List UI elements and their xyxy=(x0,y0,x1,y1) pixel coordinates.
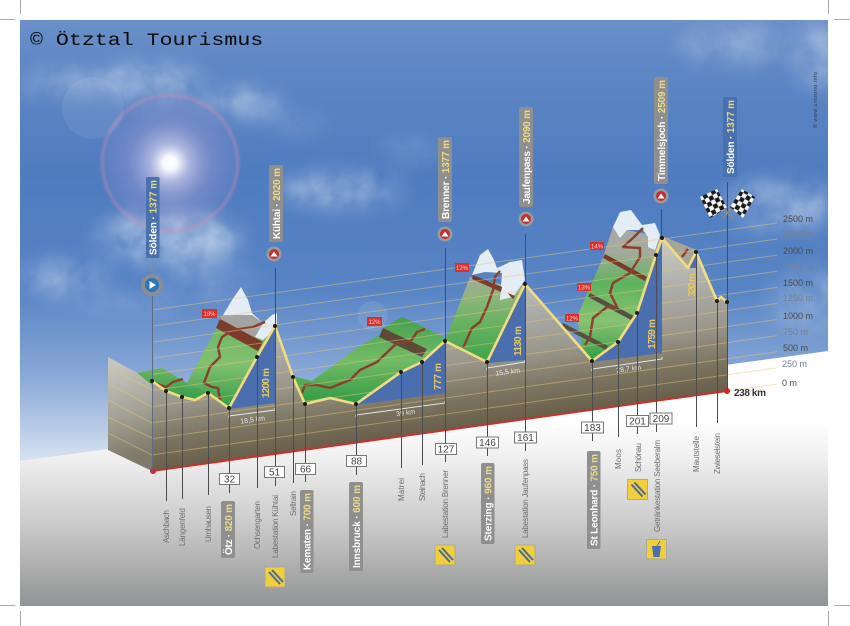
snow caps xyxy=(223,210,660,340)
km 66: 66 xyxy=(300,464,311,476)
place names below profile: Umhausen xyxy=(204,506,213,542)
icon: food station Jaufenpass xyxy=(515,545,535,565)
title: © Ötztal Tourismus xyxy=(30,30,263,50)
tag: 18% xyxy=(202,309,217,318)
place names below profile: Zwieselstein xyxy=(713,433,722,474)
altitude scale labels xyxy=(782,214,813,388)
km 161 xyxy=(514,432,536,444)
height: 320 m: 320 m xyxy=(687,273,698,297)
icon: summit Kühtai xyxy=(266,246,282,262)
km 209 xyxy=(650,413,672,425)
slope: Timmelsjoch xyxy=(577,227,662,361)
snow: Jaufenpass xyxy=(472,249,525,300)
place names below profile: Steinach xyxy=(418,473,427,501)
tag: 12% Brenner: 12% xyxy=(368,320,381,326)
distance brackets xyxy=(229,357,662,426)
tag: 12% Brenner xyxy=(367,317,382,326)
slope: Brenner xyxy=(293,317,445,406)
km 201: 201 xyxy=(629,416,646,428)
km 66 xyxy=(296,464,316,476)
green slopes and mountains xyxy=(137,227,697,408)
tag: 12% Jaufenpass: 12% xyxy=(456,266,469,272)
altitude scale labels: 0 m xyxy=(782,378,797,388)
label: Sterzing: Sterzing · 960 m xyxy=(484,466,494,541)
altitude scale labels: 1000 m xyxy=(783,311,813,321)
gradient tags xyxy=(202,242,604,326)
triangle: Zwieselstein xyxy=(688,252,696,268)
triangle: Jaufenpass xyxy=(488,284,525,363)
km 88 xyxy=(346,456,366,468)
place names below profile xyxy=(162,433,722,558)
label: Innsbruck: Innsbruck · 600 m xyxy=(352,485,363,568)
tag: 13% xyxy=(577,283,591,292)
km 51: 51 xyxy=(269,468,280,478)
icon: food station Brenner xyxy=(435,545,455,565)
tag: 14% xyxy=(590,242,604,250)
distance: 18,5 km: 18,5 km xyxy=(240,415,266,426)
icon: summit Jaufenpass xyxy=(518,212,534,226)
altitude grid lines xyxy=(108,223,777,471)
altitude scale labels: 250 m xyxy=(782,359,807,369)
label: Sölden start: Sölden · 1377 m xyxy=(148,180,160,255)
band: Timmelsjoch 14% xyxy=(603,254,647,281)
climb triangles xyxy=(230,238,696,409)
background: sky xyxy=(20,20,828,470)
profile left side wall xyxy=(108,357,152,471)
band: Jaufenpass lower xyxy=(508,293,515,299)
marker lines xyxy=(152,182,728,501)
label: St Leonhard: St Leonhard · 750 m xyxy=(590,454,600,546)
altitude scale labels: 1500 m xyxy=(783,278,813,288)
height: 1200 m: 1200 m xyxy=(261,368,272,398)
distance: 28,7 km: 28,7 km xyxy=(616,364,642,375)
icon: summit Brenner xyxy=(438,226,452,242)
icon: food station Schönau xyxy=(628,480,648,500)
slope: Kühtai xyxy=(187,315,275,408)
km 183: 183 xyxy=(584,423,601,434)
place names below profile: Ochsengarten xyxy=(253,501,262,549)
label: Kematen: Kematen · 700 m xyxy=(302,493,314,570)
place names below profile: Aschbach xyxy=(162,510,171,543)
place names below profile: Mautstelle xyxy=(692,435,701,472)
height: 1759 m: 1759 m xyxy=(647,319,658,349)
sun with halo ring xyxy=(62,77,388,331)
altitude scale labels: 2000 m xyxy=(783,246,813,256)
label: Sölden finish: Sölden · 1377 m xyxy=(726,100,737,174)
km 209: 209 xyxy=(653,414,670,425)
km 146: 146 xyxy=(479,438,496,449)
km 183 xyxy=(582,422,604,434)
profile ridge line xyxy=(152,238,727,408)
tag: 13%: 13% xyxy=(578,286,591,292)
kilometre boxes xyxy=(220,413,672,486)
triangle: Brenner xyxy=(356,341,445,405)
band: Timmelsjoch 13% xyxy=(588,293,634,320)
band: Kühtai steep xyxy=(216,319,263,351)
km 32: 32 xyxy=(224,474,235,486)
profile body xyxy=(152,238,727,471)
label: Kühtai: Kühtai · 2020 m xyxy=(272,168,283,239)
height: 777 m: 777 m xyxy=(433,363,444,390)
ground xyxy=(20,351,828,606)
icon: drink station xyxy=(646,540,666,559)
km 51 xyxy=(264,466,284,478)
slope: Jaufenpass xyxy=(445,277,525,362)
height: 1130 m: 1130 m xyxy=(513,326,524,356)
tag: 12% Timmelsjoch xyxy=(565,314,579,322)
route lines xyxy=(152,228,688,400)
label: Timmelsjoch: Timmelsjoch · 2509 m xyxy=(657,80,668,181)
altitude scale labels: 2250 m xyxy=(783,229,813,239)
altitude scale labels: 750 m xyxy=(783,327,808,337)
band: Kühtai grey rock xyxy=(220,315,263,342)
slope: Zwieselstein xyxy=(662,236,697,268)
triangle: Timmelsjoch xyxy=(592,238,662,362)
band: Jaufenpass xyxy=(472,275,502,292)
altitude scale labels: 2500 m xyxy=(783,214,813,224)
slope: valley hills xyxy=(137,368,229,408)
rock bands and route xyxy=(152,228,688,400)
band: Brenner xyxy=(379,328,427,357)
place names below profile: Labestation Brenner xyxy=(441,470,450,538)
label: Brenner: Brenner · 1377 m xyxy=(441,140,452,219)
km 161: 161 xyxy=(517,433,534,444)
altitude scale labels: 1250 m xyxy=(783,293,813,303)
place names below profile: Labestation Kühtai xyxy=(271,495,280,558)
snow: Kühtai xyxy=(223,287,277,340)
triangle: Kühtai xyxy=(230,326,275,409)
place names below profile: Moos xyxy=(614,449,623,469)
km 201 xyxy=(626,416,648,428)
place names below profile: Längenfeld xyxy=(178,508,187,546)
km 146 xyxy=(476,437,498,449)
place names below profile: Getränkestation Seeberalm xyxy=(653,440,662,532)
label: Ötz: Ötz · 820 m xyxy=(222,504,235,555)
icon: summit Timmelsjoch xyxy=(654,188,668,204)
band: Timmelsjoch 12% xyxy=(562,323,608,350)
distance: 15,5 km: 15,5 km xyxy=(495,367,521,378)
km 32 xyxy=(220,474,240,486)
ridge node dots xyxy=(150,236,729,410)
km 127: 127 xyxy=(438,444,455,456)
place names below profile: Schönau xyxy=(634,443,643,472)
icon: start button xyxy=(141,274,163,296)
tag: 18%: 18% xyxy=(203,312,216,318)
icon: finish flags xyxy=(700,189,755,219)
clouds xyxy=(20,25,850,330)
tag: 14%: 14% xyxy=(591,244,604,250)
altitude scale labels: 500 m xyxy=(783,343,808,353)
tag: 12% Jaufenpass xyxy=(455,263,469,272)
copyright credit: © www.unisono.info xyxy=(812,72,819,128)
tag: 12% Timmelsjoch: 12% xyxy=(566,316,579,322)
base red line xyxy=(150,388,730,474)
place names below profile: Sellrain xyxy=(289,491,298,516)
altitude scale labels: 1750 m xyxy=(783,262,813,272)
snow: Timmelsjoch xyxy=(613,210,660,250)
distance: 39 km: 39 km xyxy=(396,409,416,418)
climb heights xyxy=(261,273,698,398)
km 88: 88 xyxy=(351,456,362,468)
label: Jaufenpass: Jaufenpass · 2090 m xyxy=(522,110,533,204)
place names below profile: Labestation Jaufenpass xyxy=(521,459,530,538)
place names below profile: Matrei xyxy=(397,478,406,501)
icon: food station Kühtai xyxy=(265,567,285,587)
total distance: 238 km xyxy=(734,388,766,399)
